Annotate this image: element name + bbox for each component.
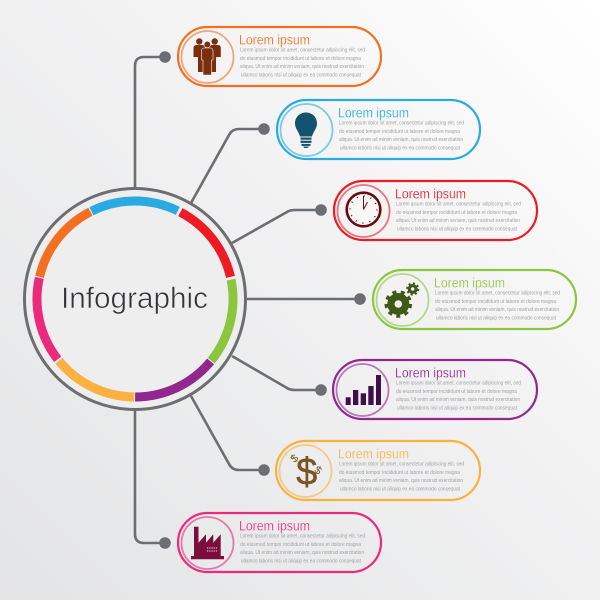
heading and text: ullamco laboris nisi ut aliquip ex ea commodo consequat	[397, 405, 518, 411]
heading and text: Lorem ipsum	[338, 446, 409, 462]
connector end dots	[159, 51, 366, 549]
panel: red clock	[334, 181, 537, 240]
heading and text: Lorem ipsum	[239, 518, 310, 534]
heading and text: Lorem ipsum dolor sit amet, consectetur adipiscing elit, sed	[339, 462, 464, 468]
icon: dollar signs: $	[312, 464, 323, 478]
heading and text: aliqua. Ut enim ad minim veniam, quis nostrud exercitation	[240, 550, 364, 556]
heading and text: do eiusmod tempor incididunt ut labore et dolore magna	[396, 210, 517, 216]
heading and text: Lorem ipsum	[395, 186, 466, 202]
heading and text	[395, 186, 521, 232]
heading and text: Lorem ipsum	[239, 32, 310, 48]
heading and text: do eiusmod tempor incididunt ut labore et dolore magna	[240, 56, 361, 62]
heading and text: Lorem ipsum dolor sit amet, consectetur adipiscing elit, sed	[435, 290, 560, 296]
heading and text: Lorem ipsum dolor sit amet, consectetur adipiscing elit, sed	[339, 120, 464, 126]
heading and text: Lorem ipsum	[395, 366, 466, 380]
central circle	[0, 161, 273, 437]
heading and text: Lorem ipsum dolor sit amet, consectetur adipiscing elit, sed	[240, 48, 365, 54]
heading and text: do eiusmod tempor incididunt ut labore et dolore magna	[240, 542, 361, 548]
heading and text: do eiusmod tempor incididunt ut labore et dolore magna	[435, 299, 556, 305]
heading and text: Lorem ipsum	[434, 276, 505, 290]
heading and text: aliqua. Ut enim ad minim veniam, quis nostrud exercitation	[339, 478, 463, 484]
icon: gears	[386, 283, 418, 316]
heading and text: ullamco laboris nisi ut aliquip ex ea commodo consequat	[397, 226, 518, 232]
heading and text: do eiusmod tempor incididunt ut labore et dolore magna	[339, 129, 460, 135]
panel: orange people	[178, 27, 381, 86]
heading and text: Lorem ipsum dolor sit amet, consectetur adipiscing elit, sed	[396, 202, 521, 208]
icon: dollar signs: $	[289, 452, 301, 465]
icon: people	[194, 38, 221, 75]
heading and text: ullamco laboris nisi ut aliquip ex ea commodo consequat	[241, 558, 362, 564]
heading and text	[395, 366, 521, 411]
heading and text	[239, 518, 365, 564]
heading and text: ullamco laboris nisi ut aliquip ex ea commodo consequat	[340, 486, 461, 492]
panel: pink factory	[178, 513, 381, 572]
panel: purple bar chart	[333, 360, 537, 419]
central title: Infographic	[61, 282, 208, 315]
heading and text: aliqua. Ut enim ad minim veniam, quis nostrud exercitation	[435, 307, 559, 313]
heading and text	[239, 32, 365, 78]
panel: yellow money	[276, 441, 480, 500]
heading and text: do eiusmod tempor incididunt ut labore et dolore magna	[339, 470, 460, 476]
heading and text: Lorem ipsum	[338, 106, 409, 120]
connector lines	[135, 57, 360, 543]
heading and text: do eiusmod tempor incididunt ut labore et dolore magna	[396, 389, 517, 395]
heading and text: aliqua. Ut enim ad minim veniam, quis nostrud exercitation	[240, 64, 364, 70]
heading and text: ullamco laboris nisi ut aliquip ex ea commodo consequat	[436, 315, 557, 321]
heading and text: aliqua. Ut enim ad minim veniam, quis nostrud exercitation	[396, 218, 520, 224]
heading and text: ullamco laboris nisi ut aliquip ex ea commodo consequat	[241, 72, 362, 78]
heading and text: Lorem ipsum dolor sit amet, consectetur adipiscing elit, sed	[240, 534, 365, 540]
icon: lightbulb	[295, 112, 317, 148]
ring of coloured segments	[0, 161, 273, 437]
panel: blue lightbulb	[277, 100, 480, 159]
icon: factory	[191, 527, 224, 559]
icon: clock	[347, 193, 380, 226]
icon: dollar signs: $	[296, 452, 317, 494]
panel: green gears	[373, 270, 576, 329]
heading and text: aliqua. Ut enim ad minim veniam, quis nostrud exercitation	[339, 137, 463, 143]
heading and text: ullamco laboris nisi ut aliquip ex ea commodo consequat	[340, 145, 461, 151]
heading and text	[338, 446, 464, 492]
icon: dollar signs	[289, 452, 323, 494]
icon: bar chart	[346, 375, 381, 405]
heading and text	[338, 106, 464, 151]
heading and text: aliqua. Ut enim ad minim veniam, quis nostrud exercitation	[396, 397, 520, 403]
heading and text: Lorem ipsum dolor sit amet, consectetur adipiscing elit, sed	[396, 380, 521, 386]
heading and text	[434, 276, 560, 321]
